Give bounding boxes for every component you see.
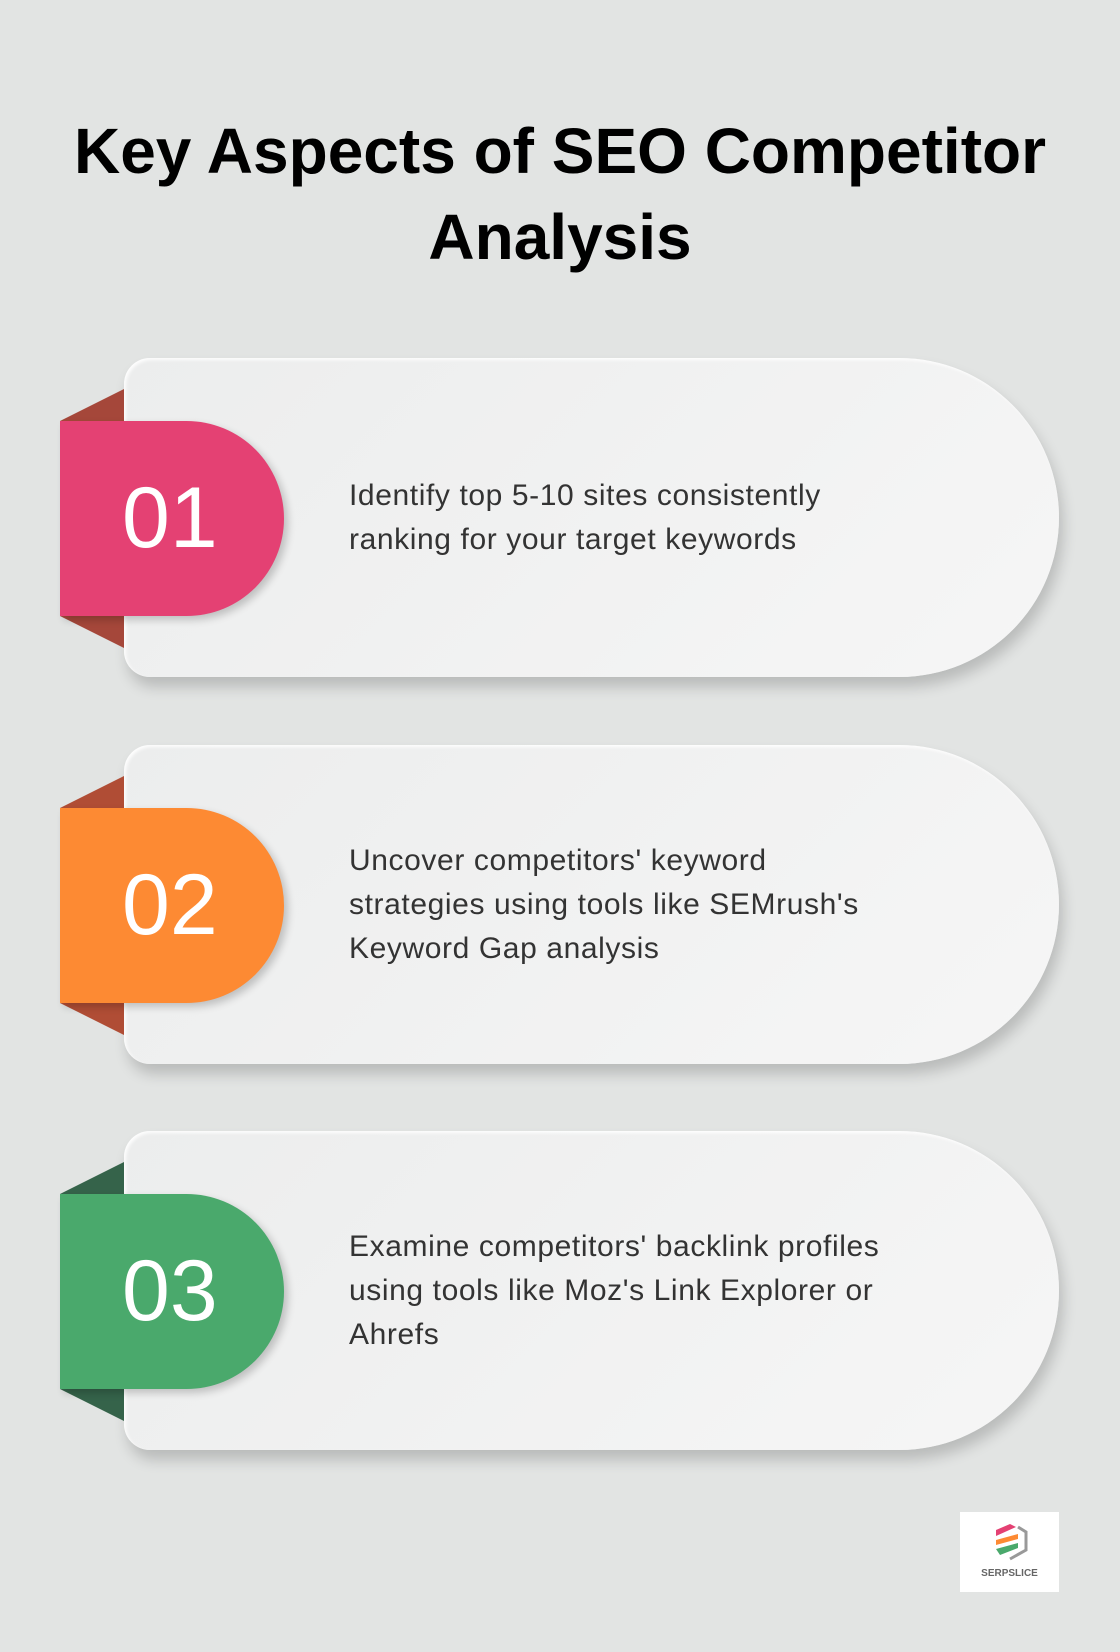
text 01: Identify top 5-10 sites consistently xyxy=(349,478,821,512)
number tab 02 xyxy=(60,808,284,1003)
number tab 01 xyxy=(60,421,284,616)
text 03: Ahrefs xyxy=(349,1318,439,1350)
logo text: SERPSLICE xyxy=(981,1568,1038,1579)
text 03: using tools like Moz's Link Explorer or xyxy=(349,1274,873,1306)
number tab 01: 01 xyxy=(122,470,218,566)
text 03 xyxy=(349,1230,879,1350)
logo: serpslice xyxy=(960,1512,1059,1592)
card 03 xyxy=(124,1131,1059,1450)
text 03: Examine competitors' backlink profiles xyxy=(349,1230,879,1262)
panel: step 01 xyxy=(60,358,1068,693)
title xyxy=(74,115,1046,273)
card 02 xyxy=(124,745,1059,1064)
panel: step 02 xyxy=(60,745,1068,1080)
fold 03 xyxy=(60,1162,124,1421)
panel: step 03 xyxy=(60,1131,1068,1466)
title: Analysis xyxy=(428,201,692,273)
title: Key Aspects of SEO Competitor xyxy=(74,115,1046,187)
text 01 xyxy=(349,478,821,556)
number tab 03 xyxy=(60,1194,284,1389)
text 01: ranking for your target keywords xyxy=(349,522,797,556)
text 02: Keyword Gap analysis xyxy=(349,932,659,964)
icon: logo mark xyxy=(996,1524,1028,1560)
number tab 02: 02 xyxy=(122,857,218,953)
fold 02 xyxy=(60,776,124,1035)
text 02: strategies using tools like SEMrush's xyxy=(349,888,859,920)
number tab 03: 03 xyxy=(122,1243,218,1339)
card 01 xyxy=(124,358,1059,677)
text 02: Uncover competitors' keyword xyxy=(349,844,767,876)
fold 01 xyxy=(60,389,124,648)
text 02 xyxy=(349,844,859,964)
